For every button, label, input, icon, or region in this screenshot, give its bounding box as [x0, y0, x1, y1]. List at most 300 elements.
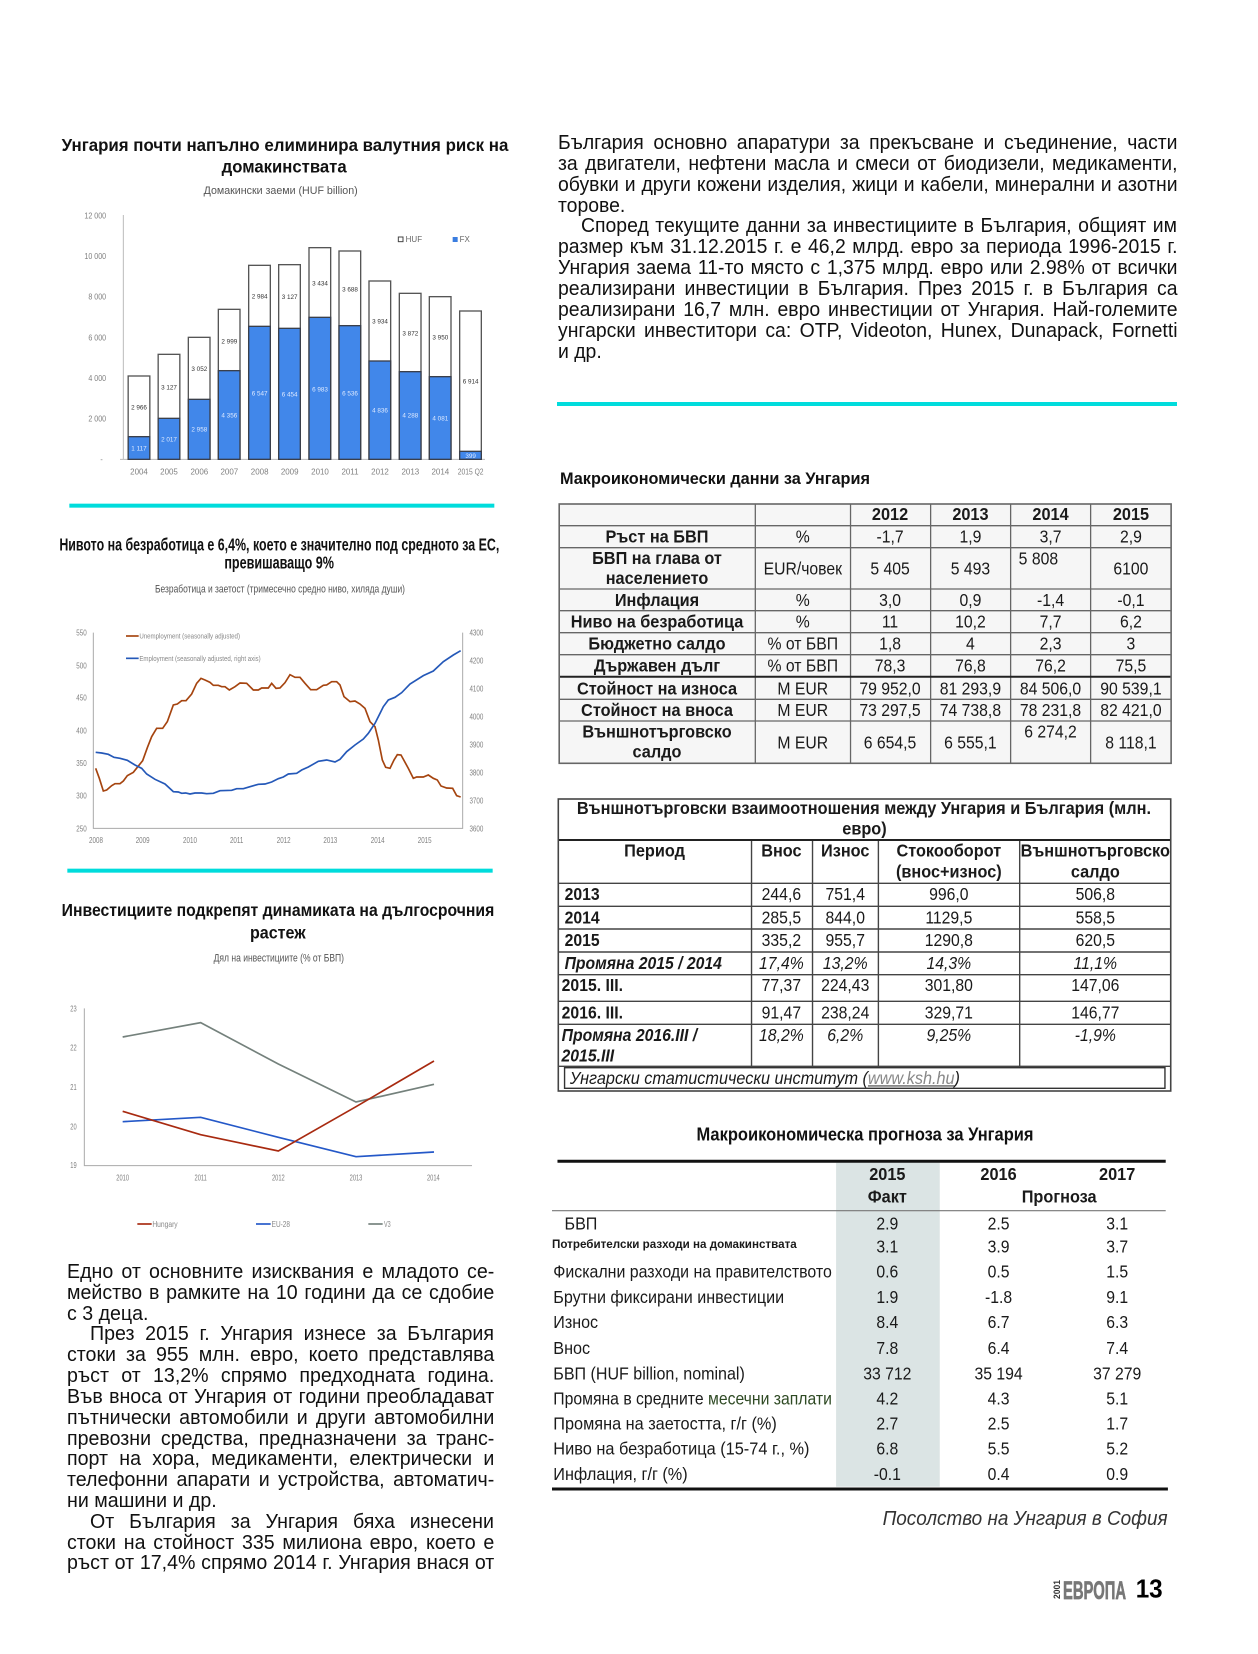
text: превозни средства, предназначени за транс-: [67, 1428, 494, 1450]
axes: 4200: [469, 655, 483, 666]
values: 3,0: [879, 590, 901, 610]
values: 7,7: [1040, 612, 1061, 632]
row labels: Ниво на безработица: [571, 611, 744, 632]
values: 1,9: [959, 527, 981, 547]
heading: household loans: домакинствата: [222, 156, 348, 176]
axes: 2015: [418, 835, 432, 845]
text: ръст от 13,2% спрямо предходната година.: [67, 1365, 494, 1387]
bar value labels: 6 547: [252, 390, 268, 397]
axes: 3700: [469, 795, 483, 806]
row labels: [552, 1213, 832, 1484]
axes: 3900: [469, 739, 483, 750]
y axis: 12 000: [84, 211, 107, 221]
values: 81 293,9: [940, 678, 1001, 699]
values: 2,3: [1040, 633, 1061, 654]
column headers: Износ: [821, 840, 870, 861]
values: 77,37: [762, 975, 801, 995]
text: ръст от 17,4% спрямо 2014 г. Унгария внася от: [67, 1552, 494, 1574]
line: Hungary: [123, 1061, 434, 1151]
values: 90 539,1: [1100, 678, 1162, 699]
text: Според текущите данни за инвестициите в България, общият им: [581, 215, 1177, 237]
values: 82 421,0: [1100, 700, 1162, 720]
panel: investment chart: [62, 900, 494, 1229]
values: 147,06: [1071, 975, 1119, 995]
x axis years: 2006: [190, 466, 209, 477]
bar value labels: 3 688: [342, 286, 358, 293]
row labels: Стойност на вноса: [581, 699, 733, 720]
text: обувки и други кожени изделия, жици и кабели, минерални и азотни: [558, 174, 1177, 196]
bar value labels: 4 288: [402, 413, 419, 420]
values: 3.7: [1106, 1237, 1128, 1257]
row labels: Внос: [553, 1338, 590, 1358]
axes: 22: [70, 1042, 77, 1053]
values: 11,1%: [1074, 953, 1117, 973]
row labels: Износ: [553, 1312, 598, 1332]
values: 5 808: [1019, 548, 1058, 569]
chart subtitle: Безработица и заетост (тримесечно средно ниво, хиляда души): [155, 584, 405, 596]
stacked bar chart: [128, 248, 481, 459]
line: unemployment: [96, 675, 461, 797]
bar value labels: 3 434: [312, 281, 328, 288]
bar value labels: 3 127: [161, 385, 177, 392]
column headers: 2016: [980, 1163, 1017, 1184]
line: EU-28: [123, 1117, 434, 1157]
values: -1,9%: [1075, 1025, 1116, 1045]
legend: EU-28: [272, 1220, 290, 1229]
values: 4.3: [988, 1388, 1010, 1409]
axes: 250: [76, 823, 87, 834]
values: -0.1: [874, 1464, 901, 1484]
axes: 500: [76, 660, 87, 671]
axes: 4300: [469, 628, 483, 638]
values: 2,9: [1120, 527, 1142, 547]
column headers: Външнотърговско: [1021, 840, 1170, 861]
heading: investment: растеж: [250, 922, 306, 942]
text: размер към 31.12.2015 г. е 46,2 млрд. евро за периода 1996-2015 г.: [558, 236, 1177, 258]
values: 2.9: [876, 1213, 898, 1234]
values: 1.7: [1106, 1413, 1128, 1434]
units: M EUR: [777, 732, 828, 753]
text: Унгария заема 11-то място с 1,375 млрд. евро или 2.98% от всички: [558, 257, 1177, 279]
heading: macro data: Макроикономически данни за Унгария: [560, 469, 870, 488]
units: % от БВП: [767, 633, 838, 654]
row labels: Промяна на заетостта, г/г (%): [553, 1413, 777, 1433]
values: 2.7: [876, 1413, 898, 1434]
chart subtitle: Дял на инвестициите (% от БВП): [214, 953, 344, 965]
column headers: 2013: [952, 503, 989, 524]
column headers: 2015: [869, 1163, 906, 1184]
footer: magazine logo: [1052, 1577, 1126, 1605]
legend: [137, 1220, 391, 1229]
units: M EUR: [777, 700, 828, 720]
row labels: Ръст на БВП: [606, 526, 708, 547]
legend: FX: [460, 235, 471, 244]
legend: Employment (seasonally adjusted, right axis): [139, 654, 261, 663]
axes: 4100: [469, 684, 483, 694]
values: 3,7: [1040, 527, 1061, 547]
bar value labels: 399: [465, 453, 476, 460]
table title: [577, 798, 1151, 838]
axes: 2013: [323, 835, 337, 845]
panel: household loans chart: [62, 135, 509, 508]
values: 6,2: [1120, 612, 1142, 632]
heading: forecast: Макроикономическа прогноза за Унгария: [696, 1125, 1034, 1145]
bar value labels: 3 872: [402, 331, 419, 338]
legend: [398, 235, 471, 244]
axes: 550: [76, 628, 87, 638]
text: България основно апаратури за прекъсване и съединение, части: [558, 132, 1177, 154]
values: 301,80: [925, 975, 973, 995]
row labels: 2015.III: [561, 1046, 614, 1066]
legend: Hungary: [152, 1220, 178, 1229]
bar value labels: 2 999: [221, 338, 238, 345]
bar value labels: 2 958: [191, 427, 208, 434]
column headers: Внос: [761, 840, 802, 861]
axes: 2014: [371, 835, 385, 845]
axes: 2011: [195, 1172, 207, 1183]
axes: 2012: [272, 1172, 285, 1183]
divider: [67, 869, 493, 873]
text: мейство в рамките на 10 години да се сдобие: [67, 1282, 494, 1304]
values: 620,5: [1076, 930, 1115, 950]
row labels: Брутни фиксирани инвестиции: [553, 1287, 784, 1307]
values: 35 194: [974, 1363, 1023, 1384]
line: V3: [123, 1023, 434, 1102]
table: forecast: [552, 1161, 1168, 1489]
values: 2.5: [988, 1213, 1010, 1234]
legend: Unemployment (seasonally adjusted): [139, 632, 240, 641]
axes: 2014: [427, 1172, 440, 1183]
values: 8.4: [876, 1312, 898, 1332]
row labels: Бюджетно салдо: [588, 633, 726, 653]
values: 73 297,5: [859, 700, 921, 720]
values: 0.9: [1106, 1464, 1128, 1484]
row labels: Ниво на безработица (15-74 г., %): [553, 1439, 810, 1459]
row labels: 2015: [565, 930, 600, 950]
source credit: Посолство на Унгария в София: [883, 1508, 1168, 1530]
values: 506,8: [1076, 884, 1115, 904]
values: 1290,8: [925, 930, 973, 950]
row labels: салдо: [633, 741, 681, 762]
values: 335,2: [762, 930, 801, 950]
values: 9,25%: [927, 1025, 971, 1045]
row labels: 2013: [565, 884, 600, 904]
footer: magazine logo: 2001: [1052, 1580, 1062, 1599]
values: [759, 884, 1119, 1045]
values: [863, 1213, 1141, 1484]
text: Едно от основните изисквания е младото се-: [67, 1261, 494, 1283]
x axis years: [130, 466, 484, 477]
row labels: 2016. III.: [562, 1002, 623, 1023]
row labels: Промяна в средните месечни заплати: [553, 1388, 832, 1408]
values: 955,7: [826, 930, 865, 950]
axes: 23: [70, 1003, 77, 1014]
values: 18,2%: [759, 1025, 804, 1045]
values: 3.1: [1106, 1213, 1128, 1234]
values: 844,0: [826, 907, 865, 928]
values: 6,2%: [827, 1025, 863, 1045]
values: 78 231,8: [1020, 700, 1081, 720]
y axis: 8 000: [88, 292, 107, 302]
y axis: 4 000: [88, 373, 107, 383]
row labels: Потребителски разходи на домакинствата: [552, 1237, 797, 1251]
values: 6 555,1: [944, 732, 997, 753]
heading: unemployment: превишаващо 9%: [224, 552, 334, 572]
values: 8 118,1: [1105, 732, 1157, 753]
table: trade Hungary-Bulgaria: [558, 798, 1171, 1091]
y axis: 10 000: [84, 251, 107, 261]
column headers: 2017: [1099, 1163, 1135, 1184]
row labels: БВП (HUF billion, nominal): [553, 1363, 745, 1383]
values: 238,24: [821, 1002, 869, 1023]
y axis: [84, 211, 485, 464]
values: 2.5: [988, 1413, 1010, 1434]
column headers: [872, 503, 1149, 524]
column headers: Период: [624, 840, 685, 861]
bar value labels: 6 914: [463, 378, 479, 385]
row labels: 2014: [565, 907, 600, 928]
values: 0.4: [988, 1464, 1010, 1484]
heading: unemployment: [59, 535, 499, 572]
values: 3: [1127, 633, 1135, 654]
values: 91,47: [762, 1002, 801, 1023]
values: 76,8: [955, 655, 986, 676]
values: 6.8: [876, 1439, 898, 1459]
row labels: Държавен дълг: [594, 655, 720, 675]
values: 6.7: [988, 1312, 1010, 1332]
column headers: 2015: [1113, 503, 1149, 524]
values: 79 952,0: [859, 678, 921, 699]
divider: [69, 504, 494, 508]
values: 5 405: [870, 558, 910, 579]
axes: 3800: [469, 767, 483, 778]
axes: 300: [76, 791, 87, 801]
values: -1.8: [985, 1287, 1012, 1307]
column headers: 2014: [1032, 503, 1069, 524]
values: 5.5: [988, 1439, 1010, 1459]
x axis years: 2005: [160, 466, 178, 477]
axes: 2009: [136, 835, 150, 845]
y axis: -: [100, 454, 103, 464]
x axis years: 2012: [371, 466, 389, 477]
bar value labels: 1 117: [131, 445, 147, 452]
text: за двигатели, нефтени масла и смеси от биодизели, медикаменти,: [558, 153, 1177, 175]
axes: 2013: [350, 1172, 362, 1183]
values: 10,2: [955, 612, 986, 632]
text: реализирани 16,7 млн. евро инвестиции от Унгария. Най-големите: [558, 299, 1177, 321]
axes: [76, 628, 483, 845]
row labels: БВП на глава от: [592, 547, 722, 568]
text: ни машини и др.: [67, 1490, 216, 1512]
legend: [126, 632, 261, 663]
values: 78,3: [875, 655, 905, 676]
bar value labels: 6 454: [282, 392, 298, 399]
values: 1,8: [879, 633, 901, 654]
bar value labels: 2 966: [131, 404, 147, 411]
text: унгарски инвеститори са: OTP, Videoton, Hunex, Dunapack, Fornetti: [558, 320, 1177, 342]
heading: unemployment: Нивото на безработица е 6,4%, което е значително под средното за ЕС,: [59, 535, 499, 555]
values: 285,5: [762, 907, 801, 928]
axes: 4000: [469, 711, 483, 722]
values: 9.1: [1106, 1287, 1128, 1307]
units: M EUR: [777, 678, 828, 699]
row labels: 2015. III.: [562, 975, 623, 995]
values: 7.8: [876, 1338, 898, 1358]
x axis years: 2010: [311, 466, 329, 477]
table: macro data: [559, 503, 1171, 763]
axes: 2010: [183, 835, 197, 845]
values: 33 712: [863, 1363, 911, 1384]
values: 0.6: [876, 1262, 898, 1282]
bar value labels: [131, 281, 479, 460]
axes: 21: [70, 1082, 77, 1092]
x axis years: 2007: [220, 466, 239, 477]
values: 5 493: [951, 558, 990, 579]
row labels: БВП: [565, 1213, 597, 1233]
row labels: [571, 526, 744, 762]
values: 224,43: [821, 975, 869, 995]
values: 11: [882, 612, 898, 632]
axes: 19: [70, 1160, 77, 1170]
bar value labels: 2 984: [252, 294, 268, 301]
column headers: Факт: [868, 1186, 907, 1206]
text: От България за Унгария бяха изнесени: [90, 1511, 494, 1533]
values: 0,9: [959, 590, 981, 610]
right column divider: [557, 402, 1177, 406]
axes: 400: [76, 725, 87, 736]
column headers: салдо: [1071, 861, 1120, 881]
text: торове.: [558, 194, 625, 216]
values: 17,4%: [759, 953, 804, 973]
values: 558,5: [1076, 907, 1115, 928]
values: 146,77: [1071, 1002, 1119, 1023]
values: 6.4: [988, 1338, 1010, 1358]
units: % от БВП: [767, 655, 838, 676]
row labels: Промяна 2016.III /: [562, 1025, 699, 1045]
values: 329,71: [925, 1002, 973, 1023]
heading: household loans: Унгария почти напълно елиминира валутния риск на: [62, 135, 509, 155]
column headers: (внос+износ): [896, 861, 1002, 881]
axes: 2011: [230, 835, 243, 845]
chart subtitle: Домакински заеми (HUF billion): [204, 185, 358, 197]
row labels: Външнотърговско: [582, 721, 732, 741]
values: 3.9: [988, 1237, 1010, 1257]
units: EUR/човек: [764, 558, 843, 579]
highlighted 2015 column: [836, 1163, 940, 1487]
values: 5.2: [1106, 1439, 1128, 1459]
values: 1.5: [1106, 1262, 1128, 1282]
values: 1129,5: [925, 907, 972, 928]
x axis years: 2004: [130, 466, 148, 477]
row labels: [561, 884, 722, 1066]
text: пътнически автомобили и други автомобилни: [67, 1407, 494, 1429]
units: %: [796, 612, 810, 632]
text block: left column article: [67, 1261, 494, 1574]
values: 6 274,2: [1024, 722, 1077, 742]
values: 76,2: [1035, 655, 1066, 676]
bar value labels: 4 356: [221, 413, 238, 420]
x axis years: 2009: [281, 466, 299, 477]
bar value labels: 3 950: [432, 334, 449, 341]
values: -0,1: [1117, 590, 1145, 610]
bar value labels: 3 934: [372, 319, 388, 326]
table title: евро): [842, 818, 887, 838]
y axis: 6 000: [88, 333, 107, 343]
x axis years: 2015 Q2: [458, 466, 484, 477]
values: 84 506,0: [1020, 678, 1081, 699]
x axis years: 2008: [251, 466, 269, 477]
values: 74 738,8: [940, 700, 1001, 720]
units: [764, 527, 843, 753]
heading: investment: [62, 900, 494, 942]
values: 75,5: [1116, 655, 1146, 676]
axes: [70, 1003, 472, 1183]
footer: page number: 13: [1136, 1574, 1163, 1604]
text: с 3 деца.: [67, 1302, 148, 1324]
text: Във вноса от Унгария от години преобладават: [67, 1386, 494, 1408]
values: 244,6: [762, 884, 801, 904]
text: телефонни апарати и устройства, автоматич-: [67, 1469, 494, 1491]
bar value labels: 6 983: [312, 386, 328, 393]
y axis: 2 000: [88, 414, 107, 424]
column headers: 2012: [872, 503, 908, 524]
values: -1,4: [1037, 590, 1064, 610]
legend: HUF: [406, 235, 422, 244]
axes: 20: [70, 1121, 77, 1132]
values: 4: [966, 633, 975, 654]
table title: Външнотърговски взаимоотношения между Унгария и България (млн.: [577, 798, 1151, 818]
axes: 2008: [89, 835, 103, 845]
line: employment: [96, 651, 461, 794]
footer: magazine logo: ЕВРОПА: [1063, 1577, 1126, 1605]
values: 751,4: [826, 884, 865, 904]
values: 1.9: [876, 1287, 898, 1307]
axes: 3600: [469, 823, 483, 834]
values: 37 279: [1093, 1363, 1141, 1384]
values: 6 654,5: [864, 732, 916, 753]
row labels: населението: [606, 567, 708, 588]
row labels: Инфлация, г/г (%): [553, 1464, 688, 1484]
values: 3.1: [876, 1237, 898, 1257]
bar value labels: 2 017: [161, 436, 177, 443]
values: [859, 527, 1162, 753]
units: %: [796, 590, 810, 610]
row labels: Промяна 2015 / 2014: [565, 953, 722, 973]
column headers: [624, 840, 1170, 881]
bar value labels: 3 052: [191, 366, 208, 373]
x axis years: 2011: [341, 466, 359, 477]
legend: V3: [384, 1220, 391, 1229]
bar value labels: 4 836: [372, 408, 388, 415]
bar value labels: 4 081: [432, 416, 449, 423]
text: реализирани инвестиции в България. През 2015 г. в България са: [558, 278, 1177, 300]
values: -1,7: [876, 527, 904, 547]
panel: unemployment chart: [59, 535, 499, 873]
units: %: [796, 527, 810, 547]
text: През 2015 г. Унгария изнесе за България: [90, 1323, 494, 1345]
row labels: Стойност на износа: [577, 678, 737, 698]
text: и др.: [558, 340, 601, 362]
x axis years: 2013: [401, 466, 420, 477]
heading: household loans: [62, 135, 509, 176]
values: 14,3%: [927, 953, 971, 973]
heading: investment: Инвестициите подкрепят динамиката на дългосрочния: [62, 900, 494, 920]
values: 996,0: [929, 884, 969, 904]
values: 0.5: [988, 1262, 1010, 1282]
column headers: Прогноза: [1022, 1186, 1097, 1206]
values: 13,2%: [823, 953, 868, 973]
table source: Унгарски статистически институт (www.ksh.hu): [569, 1068, 960, 1088]
